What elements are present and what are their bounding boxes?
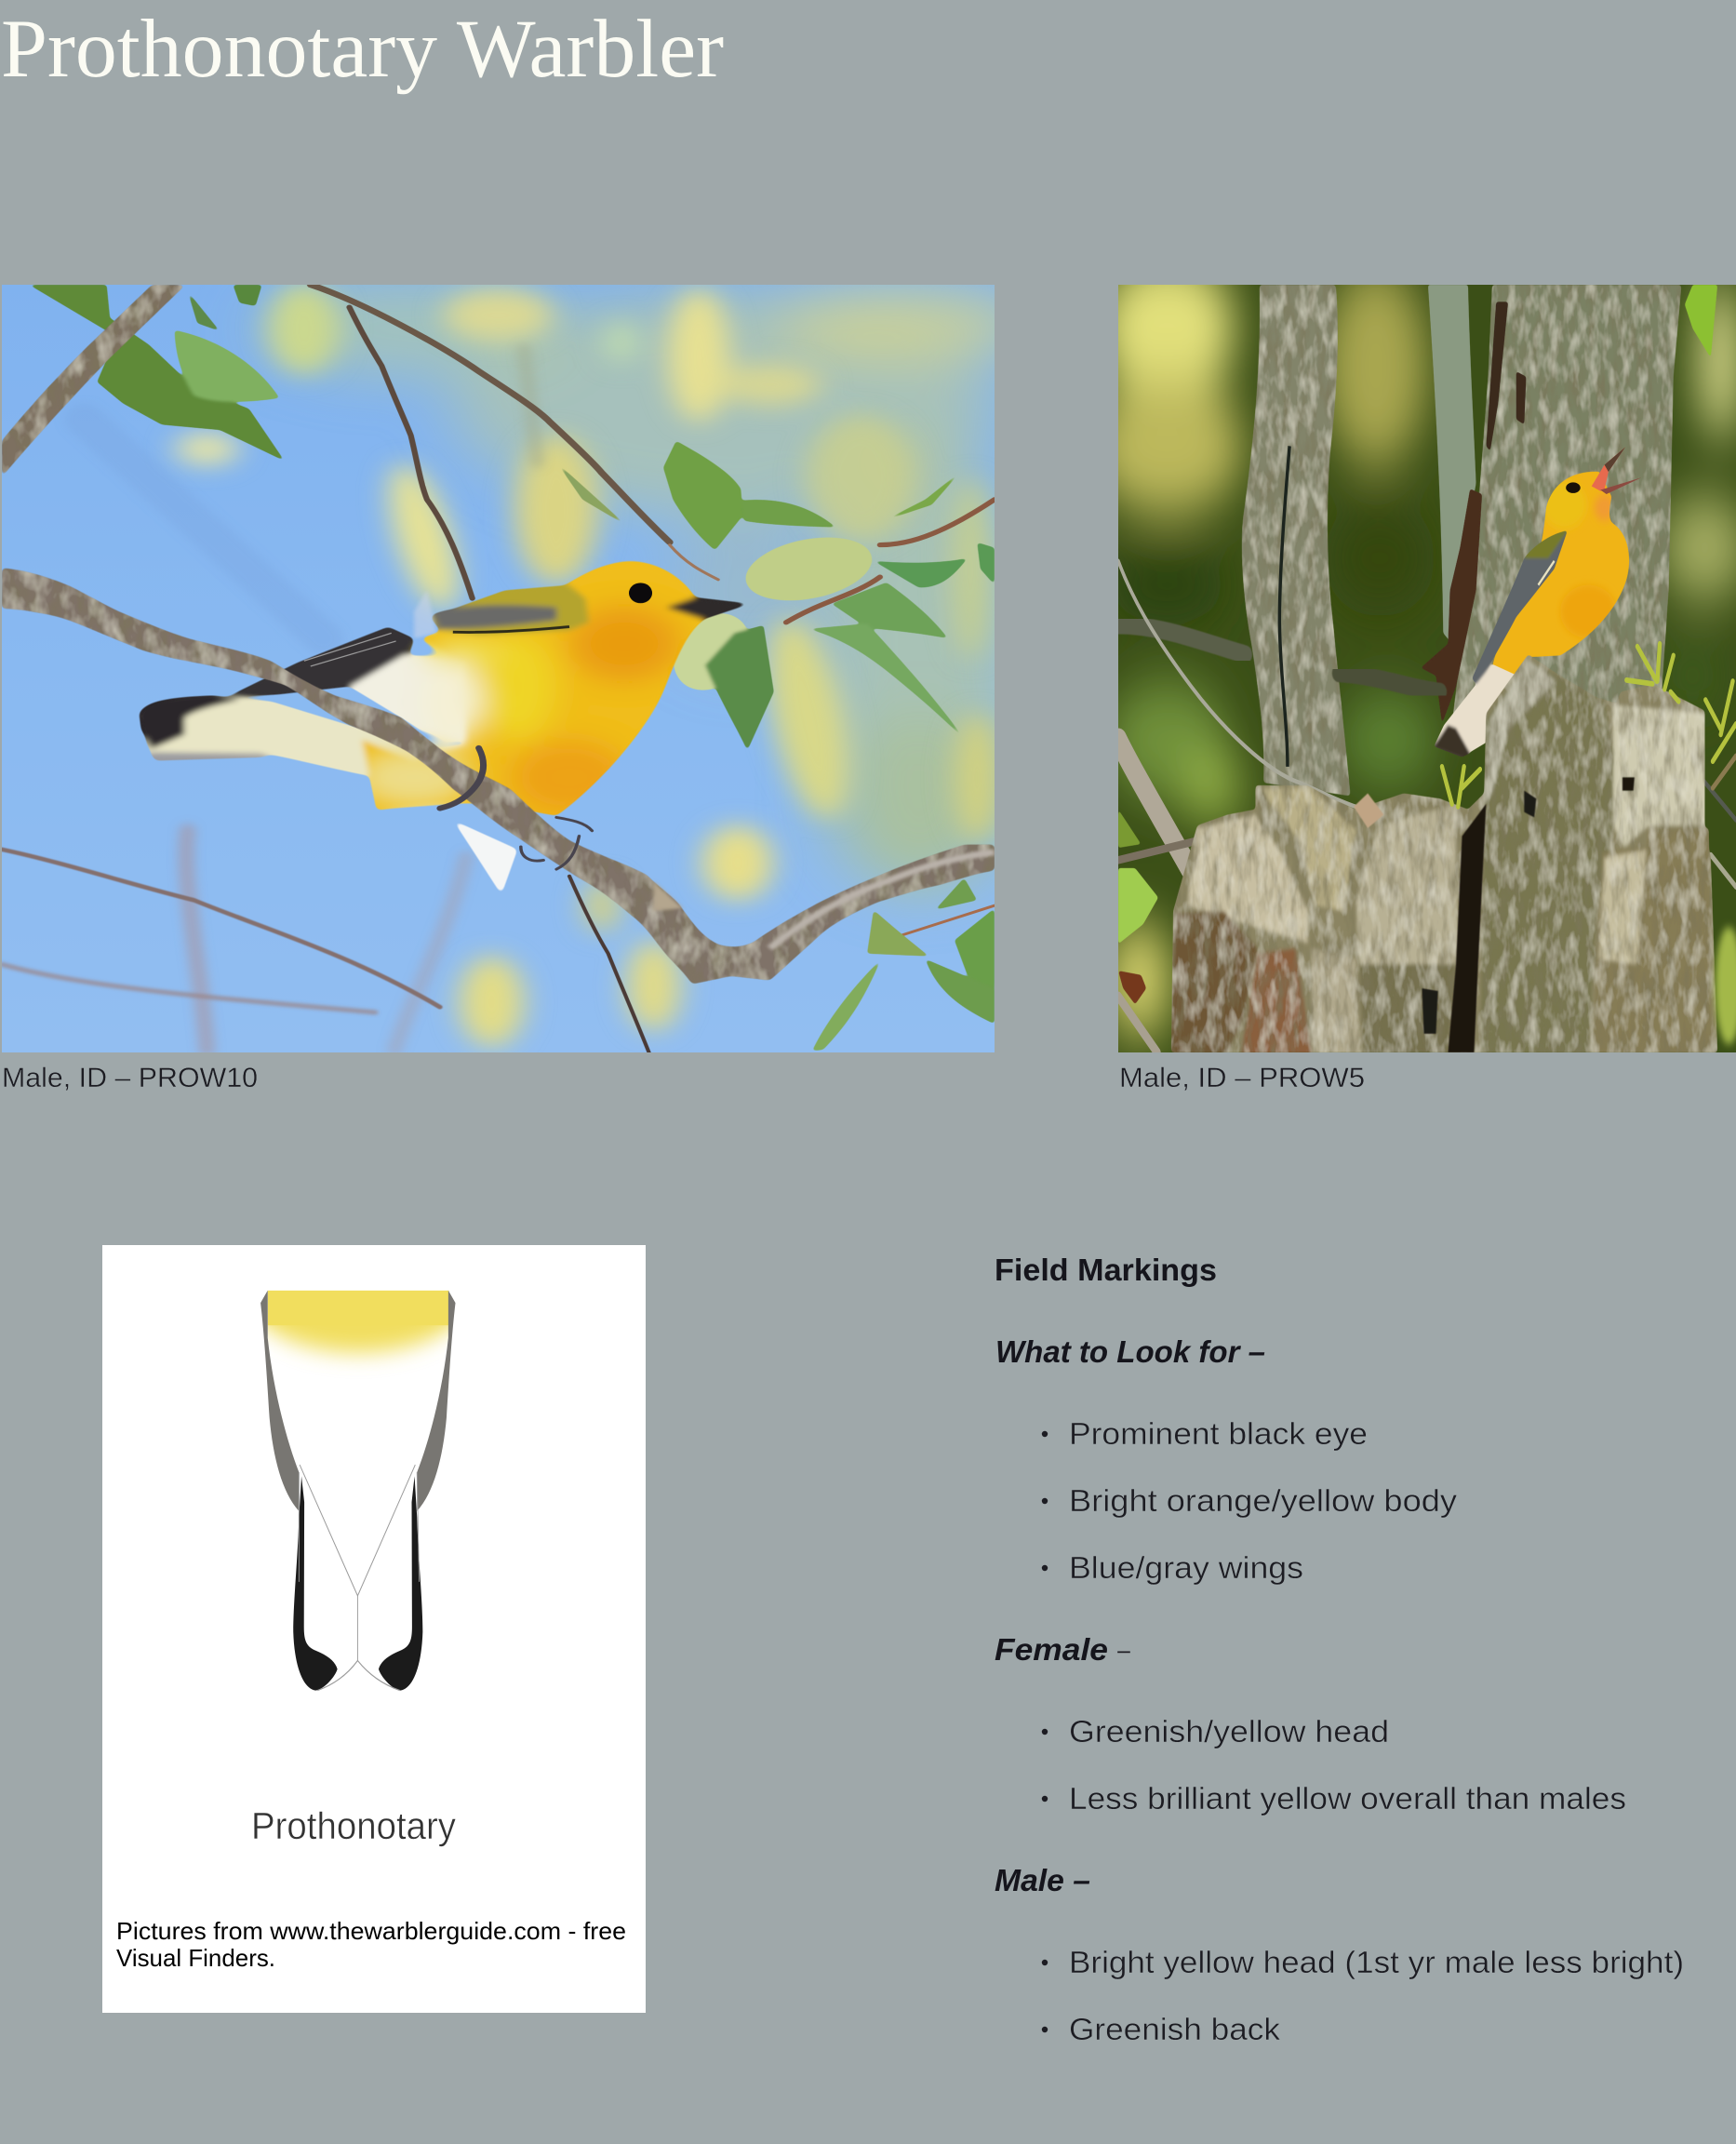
list: female: Less brilliant yellow overall than males [1069, 1781, 1626, 1816]
bird [1434, 448, 1641, 757]
twigs [311, 285, 995, 1052]
list: male: Bright yellow head (1st yr male less bright) [1069, 1945, 1684, 1979]
heading: Field Markings [995, 1253, 1217, 1287]
list: female [1042, 1714, 1626, 1816]
list: what to look for [1042, 1416, 1458, 1585]
credit note: Visual Finders. [116, 1944, 275, 1972]
blurred background foliage [2, 280, 1035, 1050]
finder label: Prothonotary [251, 1804, 456, 1847]
panel: visual finder [102, 1228, 646, 2013]
caption: photo 1: Male, ID – PROW10 [2, 1063, 258, 1093]
list: female: Greenish/yellow head [1069, 1714, 1389, 1749]
feet [440, 748, 592, 869]
side branches and twigs [1118, 561, 1736, 1052]
main trunk [1421, 285, 1681, 724]
section heading: what to look for: What to Look for – [995, 1334, 1265, 1369]
diagram: undertail pattern [260, 1290, 456, 1692]
photo: male warbler on branch [2, 285, 995, 1690]
leaves and sprigs right [1442, 285, 1736, 1044]
section heading: female: Female [995, 1632, 1108, 1667]
thin trunk [1428, 285, 1476, 644]
list: male: Greenish back [1069, 2012, 1281, 2046]
leaves top left [29, 285, 285, 461]
stump cracks and holes [1354, 777, 1635, 1052]
panel: field markings [995, 1253, 1684, 2046]
upper left branch [2, 285, 186, 477]
blurred background [1091, 254, 1736, 1039]
title: Prothonotary Warbler [1, 4, 724, 95]
list: what to look for: Bright orange/yellow body [1069, 1483, 1458, 1518]
list: male [1042, 1945, 1684, 2046]
photo: male warbler singing on stump [1118, 285, 1736, 1052]
credit note: Pictures from www.thewarblerguide.com - free [116, 1917, 626, 1945]
left leaves [1118, 810, 1158, 1004]
caption: photo 2: Male, ID – PROW5 [1119, 1063, 1365, 1093]
right foliage [556, 441, 995, 1051]
bird details [304, 583, 652, 666]
list: what to look for: Blue/gray wings [1069, 1550, 1303, 1585]
main branch [2, 568, 995, 985]
stump [1171, 654, 1717, 1052]
section heading: female: – [1117, 1632, 1130, 1667]
bird [139, 561, 751, 895]
left trunk [1242, 285, 1351, 796]
list: what to look for: Prominent black eye [1069, 1416, 1368, 1451]
credit note [116, 1917, 626, 1972]
section heading: male: Male – [995, 1863, 1090, 1897]
